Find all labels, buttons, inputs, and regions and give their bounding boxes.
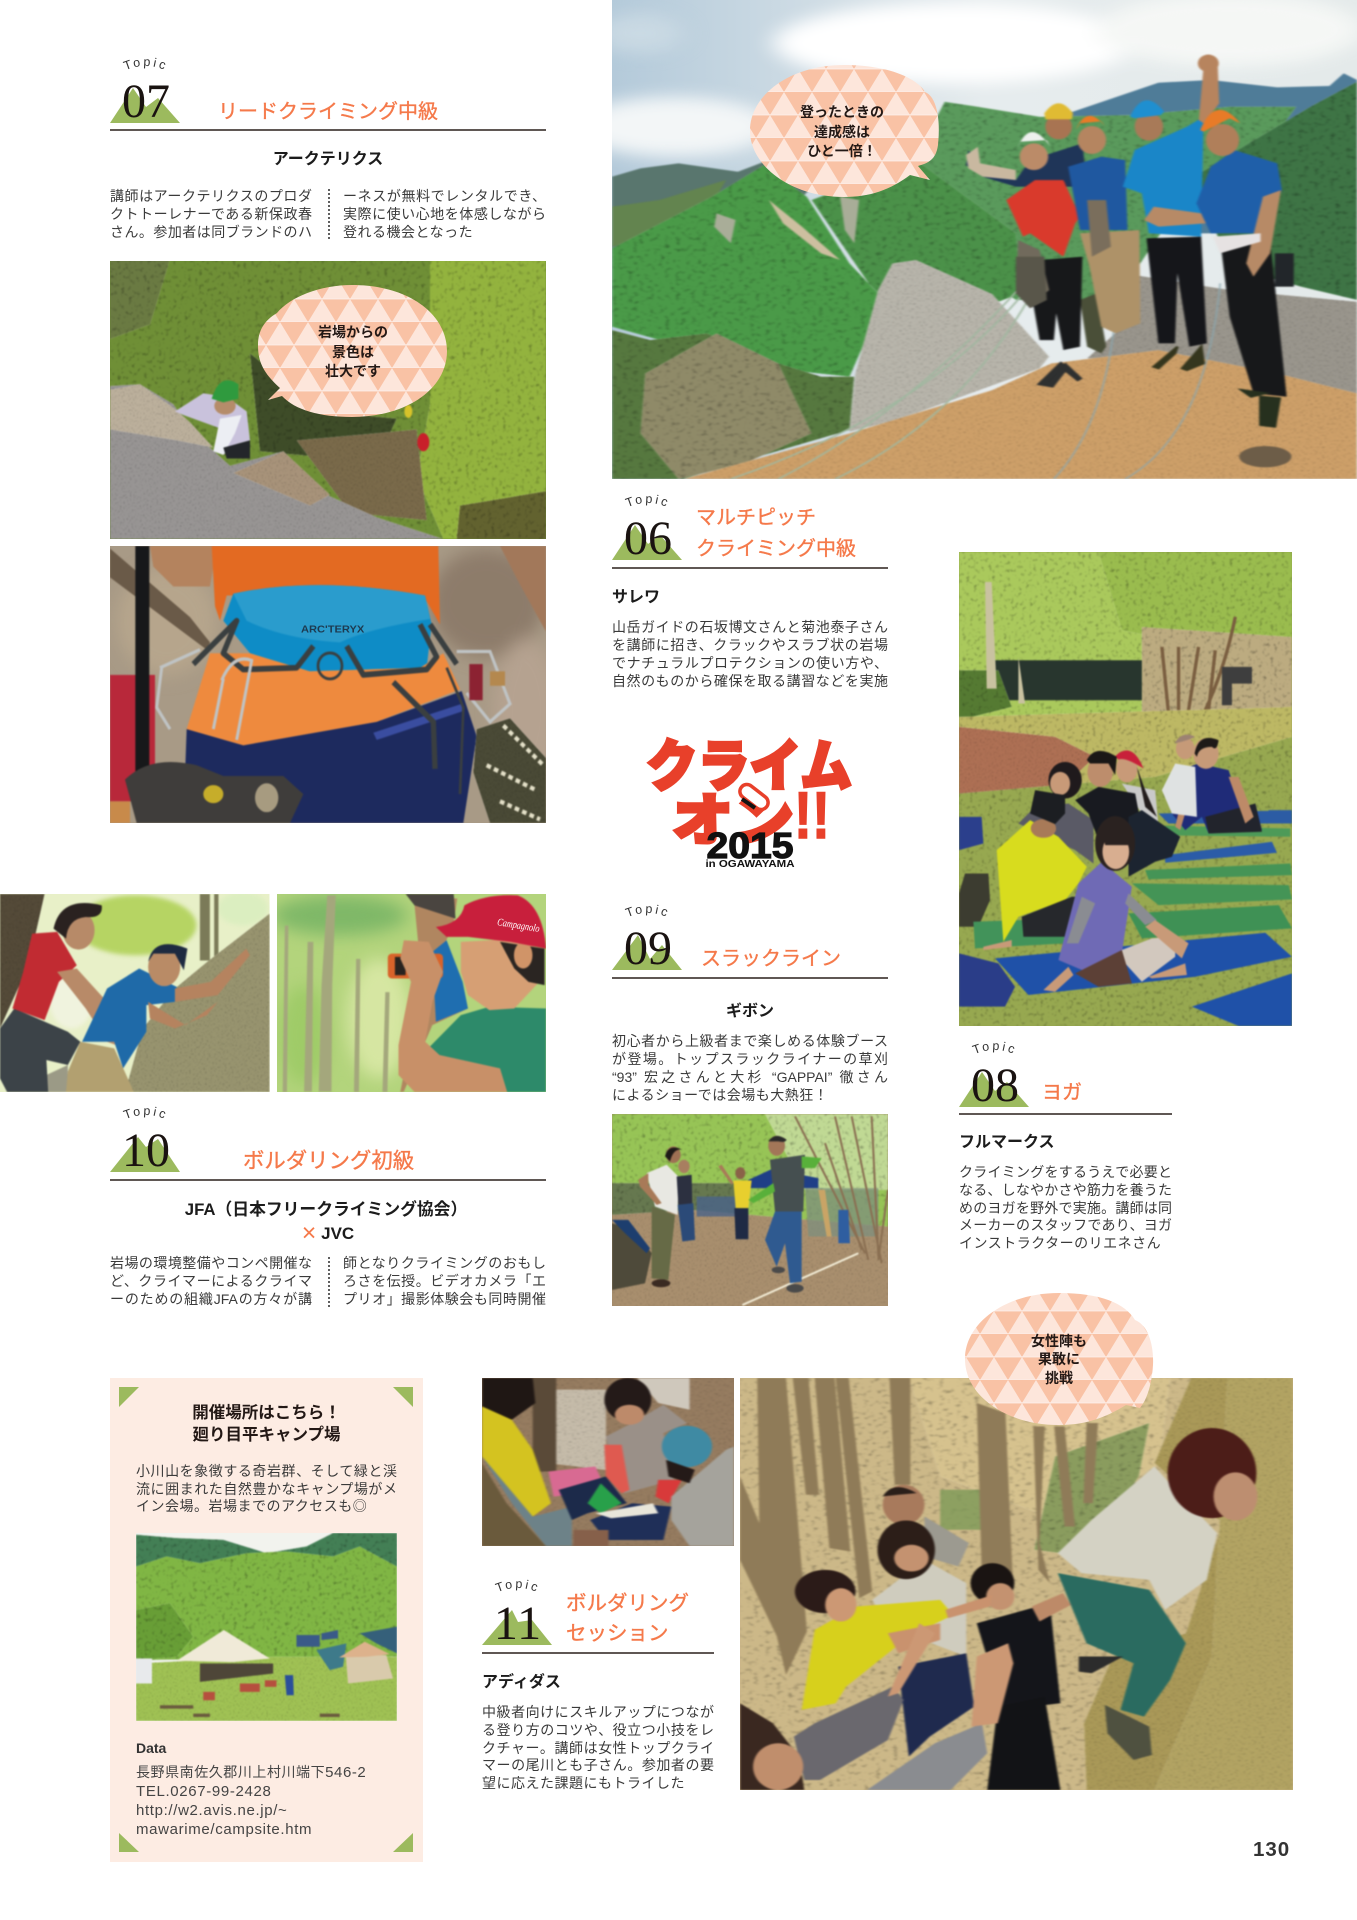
body text: 中級者向けにスキルアップにつなが <box>482 1704 714 1720</box>
topic badge 09: Topic <box>624 904 668 916</box>
topic badge 08 <box>959 1042 1029 1112</box>
topic badge 10 <box>110 1106 180 1177</box>
venue heading: 廻り目平キャンプ場 <box>192 1426 340 1444</box>
venue description: 流に囲まれた自然豊かなキャンプ場がメ <box>136 1481 397 1497</box>
event logo <box>646 725 852 870</box>
speech bubble: achievement: ひと一倍！ <box>807 143 877 159</box>
body text column 1 <box>110 1255 312 1307</box>
panel: topic 07 lead climbing <box>110 58 546 240</box>
speech bubble: achievement: 登ったときの <box>800 104 884 120</box>
body text: メーカーのスタッフであり、ヨガ <box>959 1217 1172 1233</box>
speech bubble: view from the crag <box>258 285 447 417</box>
speech bubble: women challenge: 挑戦 <box>1045 1370 1073 1386</box>
topic badge 06: 06 <box>624 512 672 565</box>
heading: bouldering session: ボルダリング <box>566 1592 689 1615</box>
topic badge 07: Topic <box>122 58 166 70</box>
body text <box>959 1164 1172 1251</box>
body text column 2 <box>343 1255 546 1307</box>
topic badge 11: Topic <box>494 1580 538 1592</box>
photo: women's bouldering session <box>740 1378 1293 1790</box>
address and contact <box>136 1764 366 1838</box>
photo: bouldering instructor and climber <box>0 894 270 1092</box>
topic badge 07 <box>110 58 180 128</box>
topic badge 08: Topic <box>972 1042 1014 1054</box>
venue description: 小川山を象徴する奇岩群、そして緑と渓 <box>136 1463 397 1479</box>
topic badge 11 <box>482 1580 552 1650</box>
speech bubble: achievement: 達成感は <box>814 124 870 140</box>
heading: multi-pitch climbing: マルチピッチ <box>696 507 816 529</box>
sponsor name: アークテリクス <box>273 151 383 168</box>
speech bubble: view from the crag: 壮大です <box>325 363 381 379</box>
topic badge 06: Topic <box>624 494 668 506</box>
topic badge 10: 10 <box>122 1124 170 1177</box>
photo: Arc'teryx harness close-up <box>110 546 546 823</box>
speech bubble: women challenge: 果敢に <box>1038 1351 1080 1367</box>
heading: multi-pitch climbing <box>696 507 856 560</box>
heading: lead climbing intermediate: リードクライミング中級 <box>218 101 438 123</box>
body text: でナチュラルプロテクションの使い方や、 <box>612 655 888 671</box>
address and contact: TEL.0267-99-2428 <box>136 1783 272 1800</box>
panel: topic 09 slackline <box>612 904 888 1103</box>
event logo: オン <box>672 776 794 857</box>
body text column 1: 講師はアークテリクスのプロダ <box>110 188 312 204</box>
event logo: !! <box>794 778 830 852</box>
panel: topic 10 bouldering beginner <box>110 1106 546 1307</box>
body text: なる、しなやかさや筋力を養うた <box>959 1182 1172 1198</box>
body text column 1 <box>110 188 312 240</box>
sponsor name: フルマークス <box>959 1134 1055 1151</box>
address and contact: mawarime/campsite.htm <box>136 1821 312 1838</box>
photo: slackline demonstration <box>612 1114 888 1306</box>
body text: 望に応えた課題にもトライした <box>482 1775 685 1791</box>
speech bubble: view from the crag: 景色は <box>332 344 374 360</box>
body text <box>612 619 888 689</box>
data label: Data <box>136 1740 166 1756</box>
page number: 130 <box>1253 1838 1290 1861</box>
heading: yoga: ヨガ <box>1042 1082 1082 1104</box>
topic badge 07: 07 <box>122 75 170 128</box>
body text: 初心者から上級者まで楽しめる体験ブース <box>612 1033 888 1049</box>
event logo: 2015 <box>706 825 794 866</box>
photo: campsite with tents <box>136 1533 397 1721</box>
venue description: イン会場。岩場までのアクセスも◎ <box>136 1498 367 1514</box>
body text column 1: さん。参加者は同ブランドのハ <box>110 224 312 240</box>
sponsor names: JFA（日本フリークライミング協会） <box>185 1200 467 1219</box>
body text: を講師に招き、クラックやスラブ状の岩場 <box>612 637 888 653</box>
event logo: in OGAWAYAMA <box>706 858 795 870</box>
body text: る登り方のコツや、役立つ小技をレ <box>482 1722 714 1738</box>
topic badge 09: 09 <box>624 922 672 975</box>
photo: yoga on green and blue mats <box>959 552 1292 1026</box>
venue heading: 開催場所はこちら！ <box>192 1404 341 1422</box>
body text column 1: ーのための組織JFAの方々が講 <box>110 1291 312 1307</box>
speech bubble: view from the crag: 岩場からの <box>318 324 388 340</box>
body text: インストラクターのリエネさん <box>959 1235 1161 1251</box>
topic badge 08: 08 <box>971 1059 1019 1112</box>
body text: “93” 宏之さんと大杉 “GAPPAI” 徹さん <box>612 1069 888 1085</box>
heading: multi-pitch climbing: クライミング中級 <box>696 538 856 560</box>
sponsor JVC: × JVC <box>302 1219 354 1247</box>
photo: participants studying guidebook <box>482 1378 734 1546</box>
heading: bouldering session <box>566 1592 689 1645</box>
body text: マーの尾川とも子さん。参加者の要 <box>482 1757 714 1773</box>
heading: bouldering beginner: ボルダリング初級 <box>243 1149 414 1173</box>
body text: クチャー。講師は女性トップクライ <box>482 1740 714 1756</box>
body text: が登場。トップスラックライナーの草刈 <box>612 1051 888 1067</box>
topic badge 10: Topic <box>122 1106 166 1118</box>
photo: Arc'teryx harness close-up: ARC'TERYX <box>301 624 365 635</box>
body text: 山岳ガイドの石坂博文さんと菊池泰子さん <box>612 619 888 635</box>
topic badge 11: 11 <box>494 1597 542 1650</box>
body text column 1: 岩場の環境整備やコンペ開催な <box>110 1255 312 1271</box>
body text <box>612 1033 888 1103</box>
body text <box>482 1704 714 1793</box>
photo: group on summit with mountain view <box>612 0 1357 479</box>
sponsor name: サレワ <box>612 589 660 606</box>
speech bubble: women challenge <box>965 1293 1154 1425</box>
topic badge 06 <box>612 494 682 565</box>
body text column 2: 師となりクライミングのおもし <box>343 1255 546 1271</box>
panel: topic 06 multi-pitch <box>612 494 888 689</box>
body text column 2 <box>343 188 546 240</box>
venue description <box>136 1463 397 1514</box>
heading: bouldering session: セッション <box>566 1622 668 1645</box>
speech bubble: achievement <box>750 65 939 197</box>
topic badge 09 <box>612 904 682 975</box>
body text column 2: ろさを伝授。ビデオカメラ「エ <box>343 1273 546 1289</box>
body text column 2: プリオ」撮影体験会も同時開催 <box>343 1291 546 1307</box>
sponsor name: ギボン <box>726 1003 774 1020</box>
photo: climber on rock with green foliage <box>110 261 546 539</box>
panel: venue information <box>110 1378 423 1862</box>
body text: クライミングをするうえで必要と <box>959 1164 1172 1180</box>
body text column 2: 実際に使い心地を体感しながら <box>343 206 546 222</box>
panel: topic 08 yoga <box>959 1042 1172 1251</box>
body text column 1: クトトーレナーである新保政春 <box>110 206 312 222</box>
body text: によるショーでは会場も大熱狂！ <box>612 1087 828 1103</box>
address and contact: http://w2.avis.ne.jp/~ <box>136 1802 287 1819</box>
corner triangles <box>119 1387 413 1852</box>
sponsor name: アディダス <box>482 1674 561 1691</box>
heading: slackline: スラックライン <box>701 948 841 970</box>
panel: topic 11 bouldering session <box>482 1580 714 1791</box>
body text: 自然のものから確保を取る講習などを実施 <box>612 673 888 689</box>
speech bubble: women challenge: 女性陣も <box>1031 1333 1087 1349</box>
address and contact: 長野県南佐久郡川上村川端下546-2 <box>136 1764 366 1781</box>
photo: boy filming with video camera <box>277 894 546 1092</box>
venue heading <box>192 1404 341 1444</box>
body text: めのヨガを野外で実施。講師は同 <box>959 1200 1172 1216</box>
body text column 2: 登れる機会となった <box>343 224 473 240</box>
body text column 1: ど、クライマーによるクライマ <box>110 1273 312 1289</box>
body text column 2: ーネスが無料でレンタルでき、 <box>343 188 546 204</box>
